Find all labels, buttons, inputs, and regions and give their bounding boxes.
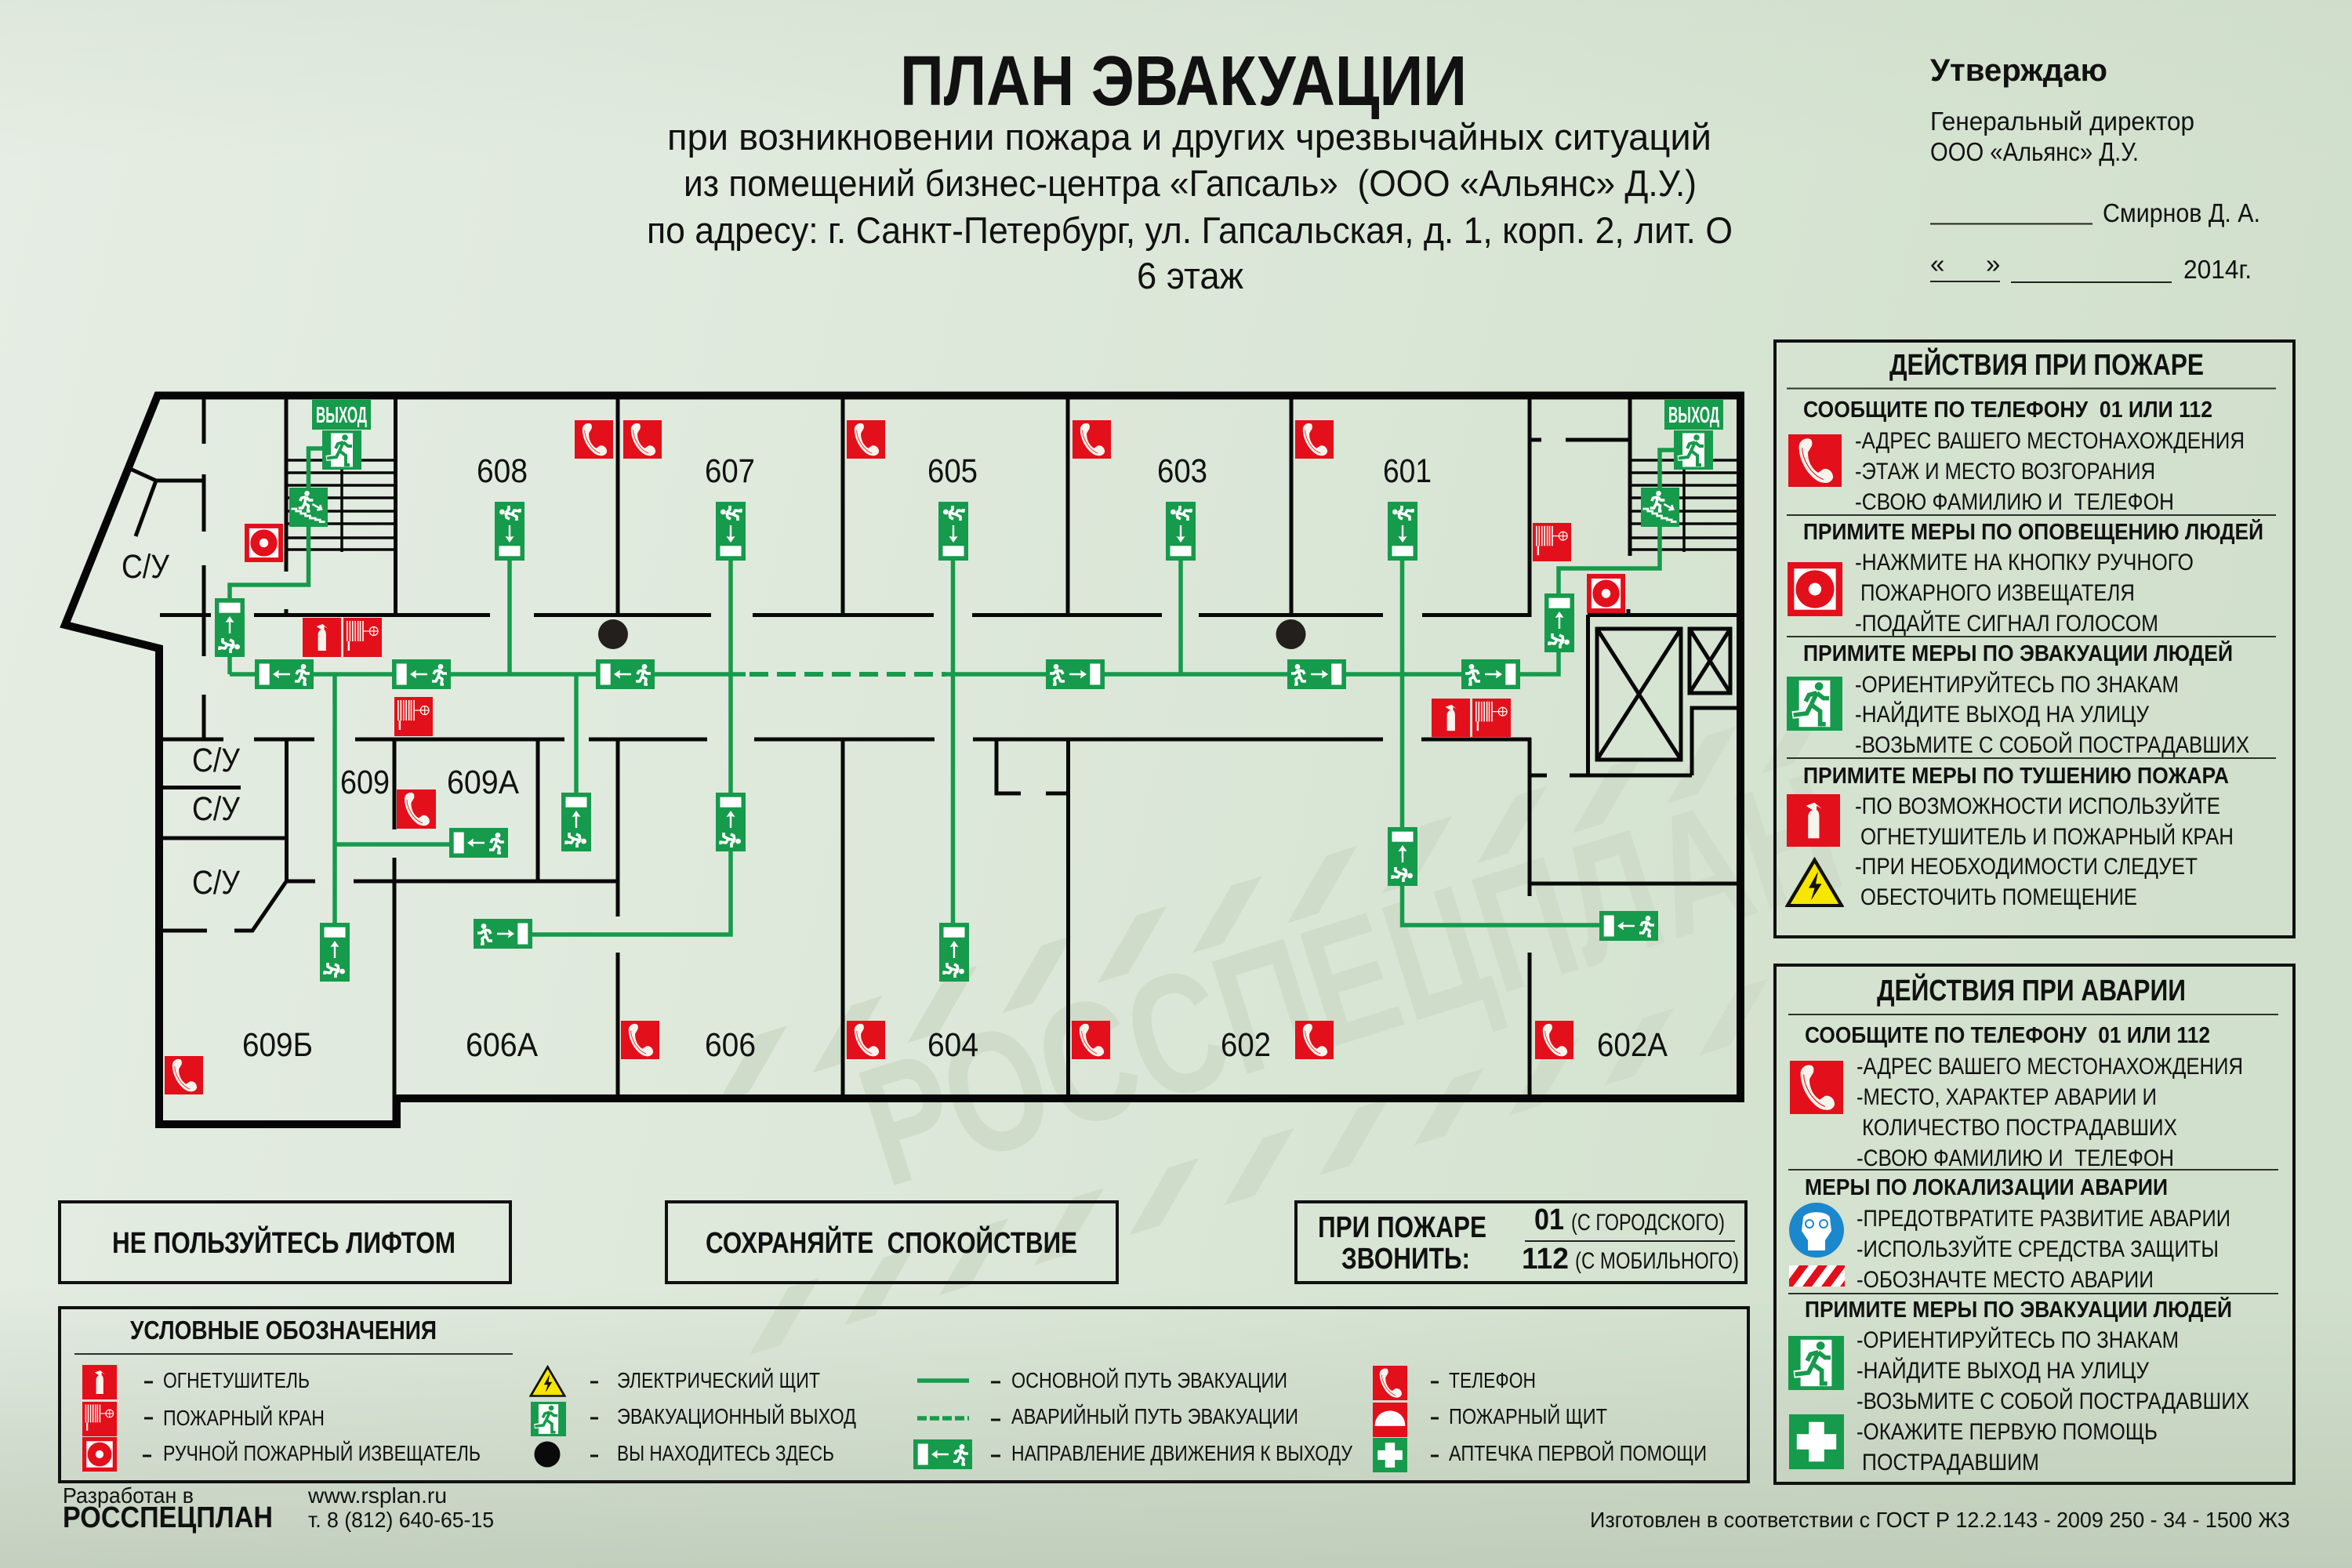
legend column 2: ЭВАКУАЦИОННЫЙ ВЫХОД [617,1404,856,1428]
heading: emergency actions: ДЕЙСТВИЯ ПРИ АВАРИИ [1877,972,2186,1007]
legend column 1: РУЧНОЙ ПОЖАРНЫЙ ИЗВЕЩАТЕЛЬ [163,1441,481,1465]
callout: do not use elevator: НЕ ПОЛЬЗУЙТЕСЬ ЛИФТОМ [112,1225,456,1260]
you are here markers [598,619,1306,649]
icons: exit doors [322,430,1713,470]
approval block: » [1986,249,2000,278]
callout: fire phone numbers: 01 [1534,1203,1564,1236]
interior walls [130,399,1740,1124]
section: localize accident: -ИСПОЛЬЗУЙТЕ СРЕДСТВА ЗАЩИТЫ [1857,1236,2219,1262]
panel: fire actions [1775,341,2294,937]
section: extinguish fire: ОГНЕТУШИТЕЛЬ И ПОЖАРНЫЙ КРАН [1860,823,2234,850]
room labels: 606А [466,1026,538,1064]
approval block [1930,53,2260,284]
subtitle: при возникновении пожара и других чрезвычайных ситуаций [667,116,1711,158]
callout: fire phone numbers: (С ГОРОДСКОГО) [1571,1210,1725,1236]
approval block: Смирнов Д. А. [2103,198,2260,227]
heading: fire actions: ДЕЙСТВИЯ ПРИ ПОЖАРЕ [1889,347,2204,382]
legend column 4 [1373,1366,1707,1472]
legend column 4: АПТЕЧКА ПЕРВОЙ ПОМОЩИ [1449,1441,1707,1465]
watermark: РОССПЕЦПЛАН [840,737,1861,1223]
legend column 2: ВЫ НАХОДИТЕСЬ ЗДЕСЬ [617,1441,834,1465]
section: report by phone: -АДРЕС ВАШЕГО МЕСТОНАХОЖДЕНИЯ [1855,428,2245,454]
developer credit: www.rsplan.ru [307,1483,447,1508]
elevator shafts [1597,629,1730,760]
exit sign left: ВЫХОД [312,400,371,430]
direction signs: corridor left [255,659,1658,941]
callout: do not use elevator [60,1202,510,1283]
room labels: 602А [1597,1026,1668,1064]
room labels [122,452,1668,1064]
section: evacuate people: -ОРИЕНТИРУЙТЕСЬ ПО ЗНАКАМ [1857,1327,2179,1353]
section: report by phone [1790,1023,2243,1171]
developer credit: т. 8 (812) 640-65-15 [308,1508,494,1532]
section: evacuate people: -ОКАЖИТЕ ПЕРВУЮ ПОМОЩЬ [1857,1419,2158,1445]
room labels: 603 [1157,452,1207,490]
subtitle: 6 этаж [1137,255,1244,296]
direction signs: down [495,502,1417,561]
section: report by phone: -СВОЮ ФАМИЛИЮ И ТЕЛЕФОН [1857,1145,2174,1171]
room labels: С/У [192,864,241,902]
callout: fire phone numbers: ЗВОНИТЬ: [1341,1243,1470,1276]
section: extinguish fire: -ПО ВОЗМОЖНОСТИ ИСПОЛЬЗУЙТЕ [1855,793,2220,819]
section: alert people: ПОЖАРНОГО ИЗВЕЩАТЕЛЯ [1860,580,2135,606]
section: report by phone [1788,397,2245,515]
room labels: 607 [705,452,755,490]
room labels: 609 [340,764,390,801]
section: extinguish fire: ПРИМИТЕ МЕРЫ ПО ТУШЕНИЮ ПОЖАРА [1803,764,2229,789]
main evacuation route [230,448,1674,935]
callout: stay calm [666,1202,1117,1283]
section: extinguish fire: ОБЕСТОЧИТЬ ПОМЕЩЕНИЕ [1860,884,2137,910]
section: localize accident [1784,1175,2230,1293]
callout: fire phone numbers: 112 [1522,1243,1569,1276]
legend column 3: ОСНОВНОЙ ПУТЬ ЭВАКУАЦИИ [1011,1368,1287,1392]
developer credit: Разработан в [63,1483,194,1508]
section: extinguish fire: -ПРИ НЕОБХОДИМОСТИ СЛЕДУЕТ [1855,854,2198,880]
approval block: 2014г. [2183,255,2252,284]
room labels: С/У [192,790,241,828]
legend column 2 [531,1367,856,1468]
section: localize accident: МЕРЫ ПО ЛОКАЛИЗАЦИИ АВАРИИ [1805,1175,2168,1200]
callout: fire phone numbers: ПРИ ПОЖАРЕ [1318,1211,1486,1244]
section: evacuate people: -НАЙДИТЕ ВЫХОД НА УЛИЦУ [1857,1357,2150,1384]
subtitle: по адресу: г. Санкт-Петербург, ул. Гапсальская, д. 1, корп. 2, лит. О [647,209,1733,251]
section: alert people: ПРИМИТЕ МЕРЫ ПО ОПОВЕЩЕНИЮ ЛЮДЕЙ [1803,518,2263,545]
icon: warning stripes [1789,1265,1845,1287]
section: localize accident: -ПРЕДОТВРАТИТЕ РАЗВИТИЕ АВАРИИ [1857,1206,2230,1232]
approval block: « [1930,249,1944,278]
section: report by phone: -АДРЕС ВАШЕГО МЕСТОНАХОЖДЕНИЯ [1857,1054,2243,1080]
subtitle: из помещений бизнес-центра «Гапсаль» (ООО «Альянс» Д.У.) [684,162,1697,204]
legend column 1: ПОЖАРНЫЙ КРАН [163,1406,325,1430]
section: evacuate people: ПРИМИТЕ МЕРЫ ПО ЭВАКУАЦИИ ЛЮДЕЙ [1803,640,2233,666]
exit sign right: ВЫХОД: ВЫХОД [1668,403,1719,428]
emergency route dashed [750,672,946,677]
section: report by phone: -ЭТАЖ И МЕСТО ВОЗГОРАНИЯ [1855,459,2155,485]
direction signs: corridor right [474,659,1520,949]
heading: legend: УСЛОВНЫЕ ОБОЗНАЧЕНИЯ [130,1316,437,1345]
direction signs: up [215,593,1574,982]
section: evacuate people: ПОСТРАДАВШИМ [1862,1450,2039,1475]
room labels: 609Б [242,1026,313,1064]
section: evacuate people [1787,640,2249,758]
legend column 2: ЭЛЕКТРИЧЕСКИЙ ЩИТ [617,1368,820,1392]
title: ПЛАН ЭВАКУАЦИИ [900,42,1467,121]
section: evacuate people [1788,1296,2249,1475]
standard compliance note: Изготовлен в соответствии с ГОСТ Р 12.2.143 - 2009 250 - 34 - 1500 ЖЗ [1590,1508,2290,1532]
exit sign right: ВЫХОД [1664,400,1723,430]
room labels: 605 [927,452,978,490]
room labels: 608 [477,452,528,490]
section: report by phone: СООБЩИТЕ ПО ТЕЛЕФОНУ 01 ИЛИ 112 [1805,1023,2210,1048]
section: evacuate people: -ВОЗЬМИТЕ С СОБОЙ ПОСТРАДАВШИХ [1855,731,2249,758]
legend column 3: НАПРАВЛЕНИЕ ДВИЖЕНИЯ К ВЫХОДУ [1011,1441,1352,1465]
callout: fire phone numbers: (С МОБИЛЬНОГО) [1575,1248,1739,1274]
section: evacuate people: ПРИМИТЕ МЕРЫ ПО ЭВАКУАЦИИ ЛЮДЕЙ [1805,1296,2232,1323]
legend column 4: ТЕЛЕФОН [1449,1368,1536,1392]
watermark [659,696,1922,1355]
section: localize accident: -ОБОЗНАЧТЕ МЕСТО АВАРИИ [1857,1267,2154,1293]
section: evacuate people: -ОРИЕНТИРУЙТЕСЬ ПО ЗНАКАМ [1855,671,2179,698]
approval block: ООО «Альянс» Д.У. [1930,137,2139,166]
stair treads [286,460,1737,552]
floor plan [65,395,1740,1124]
section: report by phone: СООБЩИТЕ ПО ТЕЛЕФОНУ 01 ИЛИ 112 [1803,397,2212,423]
callout: fire phone numbers [1296,1202,1746,1283]
icon: gas mask [1789,1203,1844,1258]
section: evacuate people: -НАЙДИТЕ ВЫХОД НА УЛИЦУ [1855,701,2150,728]
approval block: Утверждаю [1930,53,2107,88]
room labels: 601 [1383,452,1432,490]
legend column 3 [913,1368,1352,1469]
icons: telephones [165,420,1573,1094]
panel: legend [60,1308,1748,1482]
icons: stair direction [289,488,1679,527]
panel: emergency actions [1775,965,2294,1483]
exit sign left: ВЫХОД: ВЫХОД [316,403,367,428]
room labels: 609А [447,764,519,801]
section: report by phone: КОЛИЧЕСТВО ПОСТРАДАВШИХ [1862,1115,2177,1141]
room labels: С/У [122,548,170,586]
section: alert people: -ПОДАЙТЕ СИГНАЛ ГОЛОСОМ [1855,610,2158,637]
room labels: 606 [705,1026,756,1064]
room labels: С/У [192,742,241,779]
section: alert people [1788,518,2263,637]
section: extinguish fire [1787,764,2234,910]
icons: extinguishers [303,618,1470,737]
approval block: Генеральный директор [1930,107,2194,136]
subtitle [647,116,1733,296]
section: report by phone: -СВОЮ ФАМИЛИЮ И ТЕЛЕФОН [1855,489,2174,515]
section: report by phone: -МЕСТО, ХАРАКТЕР АВАРИИ И [1857,1084,2157,1110]
legend column 3: АВАРИЙНЫЙ ПУТЬ ЭВАКУАЦИИ [1011,1404,1298,1428]
section: evacuate people: -ВОЗЬМИТЕ С СОБОЙ ПОСТРАДАВШИХ [1857,1388,2249,1414]
room labels: 604 [927,1026,978,1064]
room labels: 602 [1221,1026,1271,1064]
section: alert people: -НАЖМИТЕ НА КНОПКУ РУЧНОГО [1855,550,2194,575]
developer credit: РОССПЕЦПЛАН [63,1501,273,1534]
legend column 4: ПОЖАРНЫЙ ЩИТ [1449,1404,1607,1428]
legend column 1 [82,1365,481,1472]
icons: manual fire alarms [245,524,1625,613]
developer credit [63,1483,494,1534]
outer walls [65,395,1740,1124]
callout: stay calm: СОХРАНЯЙТЕ СПОКОЙСТВИЕ [706,1225,1077,1260]
icons: fire hydrants [343,523,1571,737]
legend column 1: ОГНЕТУШИТЕЛЬ [163,1368,310,1392]
